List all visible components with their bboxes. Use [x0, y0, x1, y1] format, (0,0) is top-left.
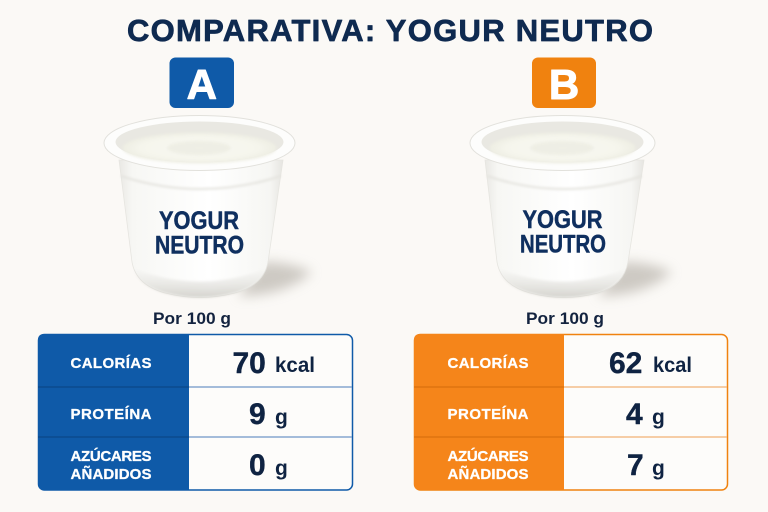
row B: calorías: CALORÍAS — [448, 355, 528, 372]
table B — [414, 334, 728, 490]
row A: calorías: 70 — [232, 347, 266, 380]
row A: azúcares añadidos: g — [275, 457, 288, 480]
row B: azúcares añadidos — [448, 447, 665, 483]
row B: azúcares añadidos: AZÚCARES — [448, 447, 528, 465]
yogurt cup B — [470, 116, 672, 298]
row B: calorías: 62 — [609, 347, 642, 380]
yogurt cup A — [104, 116, 312, 298]
row B: calorías: kcal — [653, 354, 692, 377]
row B: proteína: 4 — [626, 398, 643, 431]
row A: proteína: 9 — [249, 398, 266, 431]
row B: azúcares añadidos: g — [652, 457, 665, 480]
row B: proteína — [448, 398, 665, 431]
table A — [38, 334, 352, 490]
row B: calorías — [448, 347, 692, 380]
row A: azúcares añadidos: AÑADIDOS — [70, 465, 152, 483]
row B: proteína: g — [652, 406, 665, 429]
row A: calorías: CALORÍAS — [70, 355, 152, 372]
title: COMPARATIVA: YOGUR NEUTRO — [127, 13, 653, 48]
badge A — [170, 58, 234, 108]
row A: azúcares añadidos: AZÚCARES — [70, 447, 152, 465]
row A: calorías: kcal — [275, 354, 315, 377]
badge B — [532, 58, 596, 108]
serving label B: Por 100 g — [526, 310, 604, 328]
row A: azúcares añadidos: 0 — [249, 449, 266, 482]
badge A: A — [187, 61, 217, 108]
serving label A: Por 100 g — [153, 310, 231, 328]
row B: azúcares añadidos: AÑADIDOS — [448, 465, 528, 483]
badge B: B — [549, 61, 579, 108]
row B: azúcares añadidos: 7 — [627, 449, 644, 482]
cup B label: NEUTRO — [520, 230, 606, 258]
row A: proteína: PROTEÍNA — [70, 406, 152, 423]
row A: azúcares añadidos — [70, 447, 288, 483]
cup A label: YOGUR — [159, 207, 239, 235]
cup A label: NEUTRO — [155, 232, 244, 260]
cup B label — [520, 206, 606, 258]
row A: proteína — [70, 398, 288, 431]
row A: calorías — [70, 347, 315, 380]
cup A label — [155, 207, 244, 260]
row A: proteína: g — [275, 406, 288, 429]
row B: proteína: PROTEÍNA — [448, 406, 529, 423]
cup B label: YOGUR — [522, 206, 602, 234]
